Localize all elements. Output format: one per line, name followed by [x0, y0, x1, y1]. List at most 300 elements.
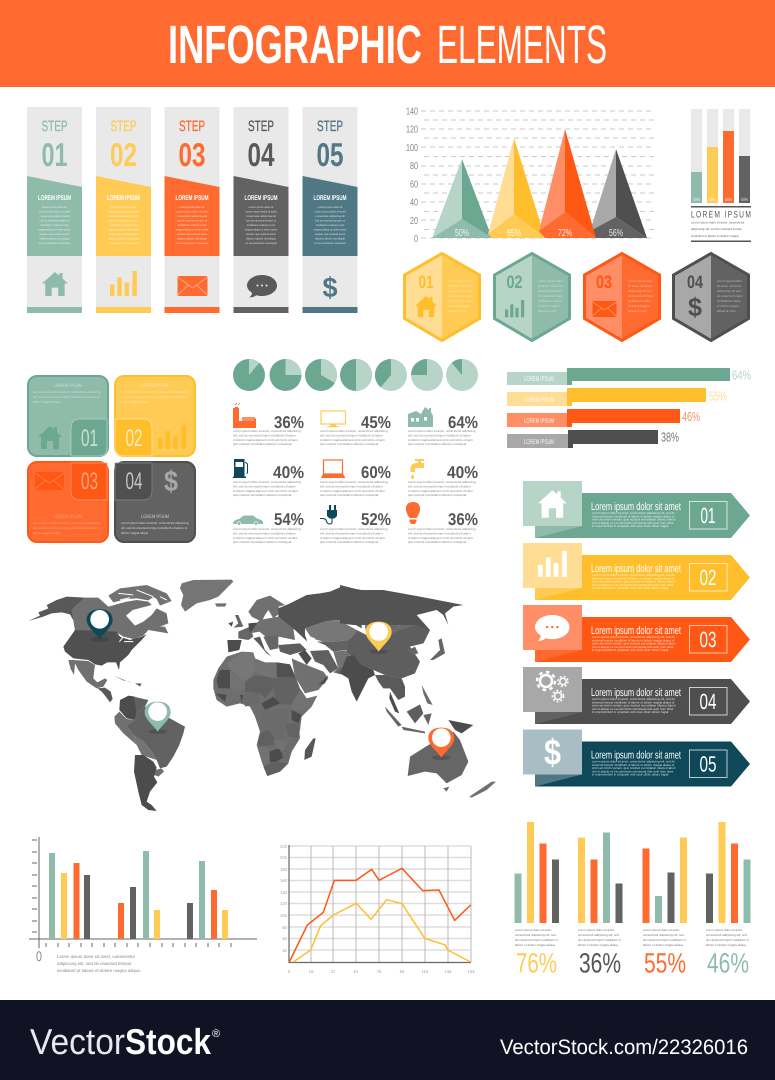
panel: rounded tile 03: Lorem ipsum dolor sit amet, consectetur adipiscing: [33, 521, 101, 525]
panel: arrow 03: eiusmod tempor incididunt ut labore et dolore magna aliqua ut: [592, 638, 674, 642]
panel: step 04: STEP: [248, 118, 274, 135]
chart: mini vertical bars: 30%: [693, 197, 700, 202]
chart: small bars 36%: 36%: [579, 948, 621, 978]
x axis labels: 153: [468, 969, 475, 974]
stat: laptop 60%: quis nostrud exercitation ullamco consequat: [320, 493, 379, 497]
stat: bulb 36%: Lorem ipsum dolor sit amet, consectetur adipiscing: [408, 527, 476, 531]
panel: hexagon 03: aliqua ut enim: [628, 309, 647, 313]
panel: arrow 02: Lorem ipsum dolor sit amet, consectetur adipiscing elit, sed do: [592, 573, 675, 577]
panel: rounded tile 01: elit, sed do eiusmod tempor incididunt ut labore et: [33, 395, 99, 399]
chart: pie row: [233, 359, 478, 391]
panel: step 03: STEP: [179, 118, 205, 135]
stat: faucet 40%: elit, sed do eiusmod tempor incididunt ut labore: [408, 484, 471, 488]
chart: mini vertical bars: 80%: [725, 197, 732, 202]
panel: rounded tile 04: dolore magna aliqua: [121, 531, 149, 535]
pyramid labels: 72%: [558, 228, 572, 239]
chart: mini vertical bars: incididunt ut labore et dolore magna: [691, 234, 739, 238]
pyramid labels: 50%: [455, 228, 469, 239]
panel: hexagon 02: incididunt ut labor: [538, 299, 562, 303]
panel: hexagon 03: et dolore magna: [628, 304, 650, 308]
stat: factory 36%: [233, 403, 304, 446]
panel: step 01: Lorem ipsum dolor sit: [42, 206, 67, 209]
pyramid labels: [455, 228, 623, 239]
stat: faucet 40%: et dolore magna aliqua ut enim ad minim veniam: [408, 489, 473, 493]
panel: arrow 02: eiusmod tempor incididunt ut labore et dolore magna aliqua ut: [592, 576, 674, 580]
icon: house with windows: [408, 407, 433, 427]
panel: rounded tile 04: LOREM IPSUM: [141, 514, 169, 520]
panel: step 05: LOREM IPSUM: [314, 195, 347, 202]
panel: hexagon 01: sit amet, consecte: [448, 284, 473, 288]
panel: rounded tile 04: 04: [126, 468, 142, 495]
panel: hexagon 04: do eiusmod tempor: [717, 294, 743, 298]
stat: plug 52%: 52%: [361, 510, 391, 529]
chart: small bars 76%: consectetur adipiscing elit, sed: [515, 933, 556, 937]
stat: fuel 40%: 40%: [273, 463, 304, 482]
panel: step 01: [27, 107, 82, 313]
panel: arrow 03: Lorem ipsum dolor sit amet: [591, 625, 681, 637]
panel: arrow 01: nisi ut aliquip ex ea commodo consequat duis aute irure dolor: [592, 521, 674, 525]
panel: step 05: STEP: [317, 118, 343, 135]
panel: hexagon 03: [584, 254, 660, 340]
stat: factory 36%: et dolore magna aliqua ut enim ad minim veniam: [233, 438, 298, 442]
stat: monitor 45%: [320, 411, 391, 446]
panel: step 03: [164, 107, 220, 313]
y axis labels: 100: [406, 143, 418, 154]
chart: small bars 36%: Lorem ipsum dolor sit amet,: [578, 928, 615, 932]
panel: rounded tile 02: LOREM IPSUM: [140, 383, 168, 389]
panel: hexagon 01: et dolore magna: [448, 304, 470, 308]
ribbon bar 55%: [507, 388, 727, 406]
chart: small bars 55%: 55%: [644, 948, 686, 978]
panel: rounded tile 01: dolore magna aliqua: [33, 400, 61, 404]
stat: plug 52%: [320, 505, 391, 544]
chart: small bars 76%: Lorem ipsum dolor sit amet,: [515, 928, 552, 932]
panel: arrow 01: in reprehenderit in voluptate velit esse cillum dolore fugiat: [592, 524, 669, 528]
panel: step 05: 05: [316, 136, 344, 173]
panel: arrow 05: $: [544, 732, 561, 772]
chart: mini vertical bars: Lorem ipsum dolor sit amet, consectetur: [691, 220, 744, 224]
panel: step 01: ex ea commodo consequat: [39, 242, 70, 245]
panel: arrow 05: [523, 730, 750, 786]
panel: arrow 05: enim ad minim veniam, quis nostrud exercitation ullamco labori: [592, 766, 676, 770]
y axis labels: 60: [410, 180, 418, 190]
panel: step 02: sed do eiusmod tempor ut: [108, 220, 139, 222]
panel: step 01: incididunt ut labore et do: [40, 224, 69, 227]
panel: step 01: 01: [42, 136, 68, 173]
panel: hexagon 01: do eiusmod tempor: [448, 294, 474, 298]
panel: hexagon 04: [674, 254, 748, 340]
panel: step 05: [302, 107, 358, 313]
panel: step 05: sed do eiusmod tempor ut: [315, 220, 345, 222]
panel: step 02: incididunt ut labore et do: [109, 224, 138, 227]
map pin: mint south america: [145, 702, 171, 734]
panel: step 01: ullamco laboris nisi aliquip: [39, 238, 70, 240]
icon: car: [233, 516, 263, 525]
stat: house 64%: quis nostrud exercitation ullamco consequat: [408, 442, 467, 446]
y axis labels: 160: [280, 878, 288, 883]
x axis labels: 37: [331, 969, 336, 974]
chart: mini vertical bars: [691, 109, 752, 242]
icon: fuel pump: [233, 459, 248, 478]
chart: small bars 46%: do eiusmod tempor incididunt ut: [706, 938, 749, 942]
stat: car 54%: elit, sed do eiusmod tempor incididunt ut labore: [233, 532, 296, 536]
footer id: VectorStock.com/22326016: [500, 1036, 748, 1059]
panel: hexagon 04: adipiscing elit sed: [717, 289, 741, 293]
stat: house 64%: 64%: [448, 413, 478, 432]
chart: small bars 55%: [642, 838, 687, 978]
panel: hexagon 02: aliqua ut enim: [538, 309, 557, 313]
ribbon bar 38%: [507, 430, 679, 448]
stat: fuel 40%: quis nostrud exercitation ullamco consequat: [233, 493, 292, 497]
stat: bulb 36%: 36%: [448, 510, 478, 529]
panel: arrow 03: [523, 605, 750, 662]
map pin: orange australia: [428, 728, 454, 760]
stat: faucet 40%: 40%: [447, 463, 478, 482]
panel: step 02: STEP: [110, 118, 136, 135]
panel: step 04: consectetur adipiscing elit: [246, 215, 276, 218]
y axis labels: 180: [280, 867, 288, 872]
icon: faucet: [410, 459, 424, 479]
stat: car 54%: 54%: [274, 510, 304, 529]
panel: hexagon 03: incididunt ut labor: [628, 299, 652, 303]
panel: step 04: veniam quis nostrud exerc: [246, 233, 277, 236]
chart: small bars 46%: consectetur adipiscing elit, sed: [706, 933, 747, 937]
ribbon bar 55%: LOREM IPSUM: [524, 397, 554, 404]
panel: step 05: ex ea commodo consequat: [314, 242, 346, 245]
chart: small bars 76%: [514, 822, 559, 978]
panel: step 02: consectetur adipiscing elit: [109, 215, 139, 218]
stat: monitor 45%: et dolore magna aliqua ut enim ad minim veniam: [320, 438, 385, 442]
panel: arrow 05: in reprehenderit in voluptate velit esse cillum dolore fugiat: [592, 773, 669, 777]
panel: hexagon 04: incididunt ut labor: [717, 299, 741, 303]
chart: small bars 36%: labore et dolore magna aliqua.: [578, 943, 619, 947]
y axis labels: 100: [280, 913, 288, 918]
panel: arrow 03: nisi ut aliquip ex ea commodo consequat duis aute irure dolor: [592, 645, 674, 649]
panel: step 01: veniam quis nostrud exerc: [39, 233, 70, 236]
panel: arrow 05: eiusmod tempor incididunt ut labore et dolore magna aliqua ut: [592, 763, 674, 767]
line: orange series: [289, 868, 471, 962]
stat: bulb 36%: elit, sed do eiusmod tempor incididunt ut labore: [408, 532, 471, 536]
x axis labels: 115: [422, 969, 429, 974]
x axis labels: 76: [377, 969, 382, 974]
map pin: teal north america: [87, 609, 113, 642]
y axis labels: 80: [410, 161, 418, 172]
panel: hexagon 04: $: [688, 292, 703, 322]
icon: light bulb: [406, 502, 420, 524]
panel: hexagon 04: aliqua ut enim: [717, 309, 736, 313]
panel: step 05: Lorem ipsum dolor sit: [318, 206, 343, 209]
panel: step 01: LOREM IPSUM: [38, 195, 71, 202]
panel: step 04: Lorem ipsum dolor sit: [249, 206, 274, 209]
panel: rounded tile 02: 02: [126, 425, 142, 452]
panel: arrow 01: Lorem ipsum dolor sit amet: [591, 501, 681, 513]
stat: monitor 45%: 45%: [361, 413, 391, 432]
panel: rounded tile 03: LOREM IPSUM: [54, 514, 82, 520]
y axis labels: 0: [414, 234, 418, 245]
chart: small bars 55%: labore et dolore magna aliqua.: [643, 943, 684, 947]
chart: small bars 76%: do eiusmod tempor incididunt ut: [515, 938, 558, 942]
icon: factory: [233, 403, 256, 428]
chart: small bars 55%: do eiusmod tempor incididunt ut: [643, 938, 686, 942]
stat: laptop 60%: elit, sed do eiusmod tempor incididunt ut labore: [320, 484, 383, 488]
panel: rounded tile 04: elit, sed do eiusmod tempor incididunt ut labore et: [121, 526, 187, 530]
panel: hexagon 01: [404, 254, 480, 340]
panel: step 05: incididunt ut labore et do: [316, 224, 345, 227]
chart: world map: [28, 580, 496, 811]
footer logo: Stock: [125, 1021, 212, 1062]
panel: step 02: ex ea commodo consequat: [108, 242, 139, 245]
panel: step 03: ullamco laboris nisi aliquip: [177, 238, 208, 240]
panel: step 05: consectetur adipiscing elit: [315, 215, 345, 218]
panel: step 04: ex ea commodo consequat: [245, 242, 277, 245]
stat: house 64%: elit, sed do eiusmod tempor incididunt ut labore: [408, 434, 471, 438]
y axis labels: 200: [280, 855, 288, 860]
panel: step 01: magna aliqua ut enim minim: [38, 228, 71, 232]
panel: rounded tile 01: 01: [81, 425, 98, 452]
stat: factory 36%: quis nostrud exercitation ullamco consequat: [233, 442, 292, 446]
stat: house 64%: [408, 407, 478, 446]
panel: step 05: magna aliqua ut enim minim: [314, 228, 346, 232]
stat: car 54%: quis nostrud exercitation ullamco consequat: [233, 540, 292, 544]
panel: hexagon 04: Lorem ipsum dolor: [717, 279, 742, 283]
ribbon bar 64%: [507, 368, 751, 385]
chart: small bars 46%: [706, 822, 750, 978]
y axis labels: 40: [282, 948, 288, 953]
y axis labels: 140: [406, 106, 418, 118]
icon: gears: [537, 672, 568, 702]
pyramid labels: 65%: [507, 228, 521, 239]
icon: plug: [320, 505, 337, 524]
panel: step 04: incididunt ut labore et do: [247, 224, 276, 227]
x axis labels: 134: [444, 969, 452, 974]
panel: hexagon 04: et dolore magna: [717, 304, 739, 308]
panel: arrow 01: [523, 481, 750, 538]
ribbon bar 46%: [507, 409, 700, 427]
stat: bulb 36%: quis nostrud exercitation ullamco consequat: [408, 540, 467, 544]
panel: rounded tile 03: elit, sed do eiusmod tempor incididunt ut labore et: [33, 526, 99, 530]
panel: step 03: LOREM IPSUM: [176, 195, 209, 202]
chart: line chart: [280, 844, 475, 974]
x axis labels: 16: [309, 969, 314, 974]
pyramid 65%: [488, 138, 545, 238]
panel: step 05: veniam quis nostrud exerc: [315, 233, 346, 236]
y axis labels: 220: [280, 844, 288, 849]
chart: small bars 55%: Lorem ipsum dolor sit amet,: [643, 928, 680, 932]
y axis labels: 40: [410, 198, 418, 208]
title second word: ELEMENTS: [437, 15, 607, 75]
stat: fuel 40%: Lorem ipsum dolor sit amet, consectetur adipiscing: [233, 480, 301, 484]
stat: plug 52%: Lorem ipsum dolor sit amet, consectetur adipiscing: [320, 527, 388, 531]
chart: small bars 55%: consectetur adipiscing elit, sed: [643, 933, 684, 937]
panel: step 04: sed do eiusmod tempor ut: [246, 220, 276, 222]
footer logo: Vector: [30, 1021, 125, 1062]
panel: rounded tile 04: Lorem ipsum dolor sit amet, consectetur adipiscing: [121, 521, 189, 525]
panel: arrow 03: 03: [700, 627, 716, 652]
panel: arrow 02: Lorem ipsum dolor sit amet: [591, 563, 681, 575]
x axis labels: 0: [288, 969, 291, 974]
y axis labels: [406, 106, 418, 245]
stat: monitor 45%: Lorem ipsum dolor sit amet, consectetur adipiscing: [320, 429, 388, 433]
panel: hexagon 03: adipiscing elit sed: [628, 289, 652, 293]
panel: hexagon 03: Lorem ipsum dolor: [628, 279, 653, 283]
stat: bulb 36%: [406, 502, 478, 544]
stat: plug 52%: elit, sed do eiusmod tempor incididunt ut labore: [320, 532, 383, 536]
icon: laptop: [321, 460, 346, 478]
pyramid 72%: [539, 129, 596, 238]
panel: arrow 04: nisi ut aliquip ex ea commodo consequat duis aute irure dolor: [592, 707, 674, 711]
panel: arrow 02: nisi ut aliquip ex ea commodo consequat duis aute irure dolor: [592, 583, 674, 587]
chart: small bars 46%: 46%: [707, 948, 749, 978]
panel: step 03: consectetur adipiscing elit: [177, 215, 207, 218]
panel: hexagon 01: Lorem ipsum dolor: [448, 279, 473, 283]
panel: arrow 03: Lorem ipsum dolor sit amet, consectetur adipiscing elit, sed do: [592, 635, 675, 639]
ribbon bar 64%: 64%: [732, 368, 751, 382]
panel: step 03: veniam quis nostrud exerc: [177, 233, 208, 236]
panel: step 02: LOREM IPSUM: [107, 195, 140, 202]
panel: step 02: [96, 107, 151, 313]
ribbon bar 38%: LOREM IPSUM: [524, 439, 554, 446]
y axis labels: 120: [406, 124, 418, 136]
title banner: [0, 0, 775, 87]
panel: step 03: magna aliqua ut enim minim: [176, 228, 208, 232]
panel: step 03: Lorem ipsum dolor sit: [180, 206, 205, 209]
stat: laptop 60%: [320, 460, 391, 497]
panel: step 01: Lorem ipsum dolor sit amet: [39, 210, 70, 214]
chart: small bars 36%: do eiusmod tempor incididunt ut: [578, 938, 621, 942]
line: yellow series: [293, 900, 471, 962]
panel: rounded tile 01: LOREM IPSUM: [54, 383, 82, 389]
chart: small bars 36%: [578, 832, 622, 978]
stat: laptop 60%: et dolore magna aliqua ut enim ad minim veniam: [320, 489, 385, 493]
panel: step 05: $: [322, 272, 338, 303]
stat: factory 36%: elit, sed do eiusmod tempor incididunt ut labore: [233, 434, 296, 438]
panel: hexagon 02: do eiusmod tempor: [538, 294, 564, 298]
panel: arrow 04: [523, 667, 750, 724]
panel: step 02: 02: [110, 136, 137, 173]
x axis labels: 61: [354, 969, 359, 974]
stat: fuel 40%: elit, sed do eiusmod tempor incididunt ut labore: [233, 484, 296, 488]
icon: monitor: [321, 411, 346, 427]
pyramid labels: 56%: [609, 228, 623, 239]
panel: rounded tile 02: [115, 376, 195, 456]
chart caption: incididunt ut labore et dolore magna aliqua.: [57, 968, 141, 973]
title: INFOGRAPHIC: [168, 15, 422, 75]
chart: small bars 46%: labore et dolore magna aliqua.: [706, 943, 747, 947]
stat: factory 36%: Lorem ipsum dolor sit amet, consectetur adipiscing: [233, 429, 301, 433]
panel: arrow 02: [523, 543, 750, 600]
panel: hexagon 02: et dolore magna: [538, 304, 560, 308]
chart: grouped bar chart: [29, 837, 257, 973]
panel: hexagon 02: sit amet, consecte: [538, 284, 563, 288]
panel: rounded tile 03: 03: [81, 468, 98, 495]
panel: arrow 02: 02: [700, 565, 716, 590]
panel: hexagon 01: adipiscing elit sed: [448, 289, 472, 293]
stat: monitor 45%: quis nostrud exercitation ullamco consequat: [320, 442, 379, 446]
panel: step 05: ullamco laboris nisi aliquip: [315, 238, 346, 240]
panel: step 03: incididunt ut labore et do: [178, 224, 207, 227]
mini chart caption: LOREM IPSUM: [691, 210, 752, 220]
panel: step 04: 04: [248, 136, 275, 173]
chart: small bars 76%: 76%: [516, 948, 557, 978]
panel: step 02: ullamco laboris nisi aliquip: [108, 238, 139, 240]
map pins: [87, 609, 454, 760]
stat: car 54%: et dolore magna aliqua ut enim ad minim veniam: [233, 536, 298, 540]
footer bar: [0, 1000, 775, 1080]
x axis labels: 93: [400, 969, 405, 974]
y axis labels: [280, 844, 288, 953]
ribbon bar 64%: LOREM IPSUM: [524, 376, 554, 383]
panel: rounded tile 03: [28, 462, 108, 542]
panel: rounded tile 03: dolore magna aliqua: [33, 531, 61, 535]
panel: rounded tile 04: $: [164, 466, 178, 498]
panel: step 02: veniam quis nostrud exerc: [108, 233, 139, 236]
panel: arrow 05: Lorem ipsum dolor sit amet: [591, 750, 681, 762]
panel: arrow 03: in reprehenderit in voluptate velit esse cillum dolore fugiat: [592, 648, 669, 652]
map: americas and greenland: [28, 580, 233, 811]
pyramid 56%: [590, 149, 647, 238]
panel: step 03: Lorem ipsum dolor sit amet: [176, 210, 208, 214]
panel: arrow 05: 05: [700, 752, 716, 776]
chart: horizontal ribbon bars: [507, 368, 751, 448]
y axis labels: 140: [280, 890, 288, 895]
panel: hexagon 02: Lorem ipsum dolor: [538, 279, 563, 283]
panel: rounded tile 02: dolore magna aliqua: [121, 400, 149, 404]
y axis labels: 120: [280, 901, 288, 906]
stat: house 64%: et dolore magna aliqua ut enim ad minim veniam: [408, 438, 473, 442]
panel: step 04: LOREM IPSUM: [244, 195, 278, 202]
panel: hexagon 01: incididunt ut labor: [448, 299, 472, 303]
chart: small bars 36%: consectetur adipiscing elit, sed: [578, 933, 619, 937]
panel: hexagon 03: 03: [596, 272, 612, 292]
chart caption: adipiscing elit, sed do eiusmod tempor: [57, 961, 132, 966]
panel: step 04: Lorem ipsum dolor sit amet: [245, 210, 277, 214]
panel: step 05: Lorem ipsum dolor sit amet: [314, 210, 346, 214]
panel: step 03: ex ea commodo consequat: [176, 242, 208, 245]
panel: hexagon 02: adipiscing elit sed: [538, 289, 562, 293]
panel: arrow 02: in reprehenderit in voluptate velit esse cillum dolore fugiat: [592, 586, 669, 590]
map: asia and oceania: [340, 585, 496, 798]
stat: faucet 40%: quis nostrud exercitation ullamco consequat: [408, 493, 467, 497]
chart axis zero: 0: [36, 948, 42, 964]
y axis labels: 60: [282, 936, 288, 941]
ribbon bar 38%: 38%: [661, 430, 679, 444]
panel: hexagon 03: do eiusmod tempor: [628, 294, 654, 298]
panel: arrow 04: enim ad minim veniam, quis nostrud exercitation ullamco labori: [592, 704, 676, 708]
panel: hexagon 01: aliqua ut enim: [448, 309, 467, 313]
chart: small bars 76%: labore et dolore magna aliqua.: [515, 943, 556, 947]
panel: hexagon 01: 01: [418, 272, 434, 292]
stat: house 64%: Lorem ipsum dolor sit amet, consectetur adipiscing: [408, 429, 476, 433]
chart caption: Lorem ipsum dolor sit amet, consectetur: [57, 954, 136, 959]
panel: hexagon 03: sit amet, consecte: [628, 284, 653, 288]
panel: arrow 01: eiusmod tempor incididunt ut labore et dolore magna aliqua ut: [592, 514, 674, 518]
panel: rounded tile 04: [115, 462, 195, 542]
stat: laptop 60%: 60%: [361, 463, 391, 482]
panel: step 01: STEP: [42, 118, 68, 135]
stat: faucet 40%: Lorem ipsum dolor sit amet, consectetur adipiscing: [408, 480, 476, 484]
panel: step 01: consectetur adipiscing elit: [40, 215, 70, 218]
stat: bulb 36%: et dolore magna aliqua ut enim ad minim veniam: [408, 536, 473, 540]
chart: small bars 46%: Lorem ipsum dolor sit amet,: [706, 928, 743, 932]
stat: factory 36%: 36%: [274, 413, 304, 432]
panel: rounded tile 02: Lorem ipsum dolor sit amet, consectetur adipiscing: [121, 390, 189, 394]
chart: mini vertical bars: 50%: [741, 197, 748, 202]
stat: fuel 40%: [233, 459, 304, 497]
panel: rounded tile 01: [28, 376, 108, 456]
panel: rounded tile 02: elit, sed do eiusmod tempor incididunt ut labore et: [121, 395, 187, 399]
footer logo: ®: [212, 1028, 220, 1040]
panel: step 02: Lorem ipsum dolor sit amet: [108, 210, 139, 214]
